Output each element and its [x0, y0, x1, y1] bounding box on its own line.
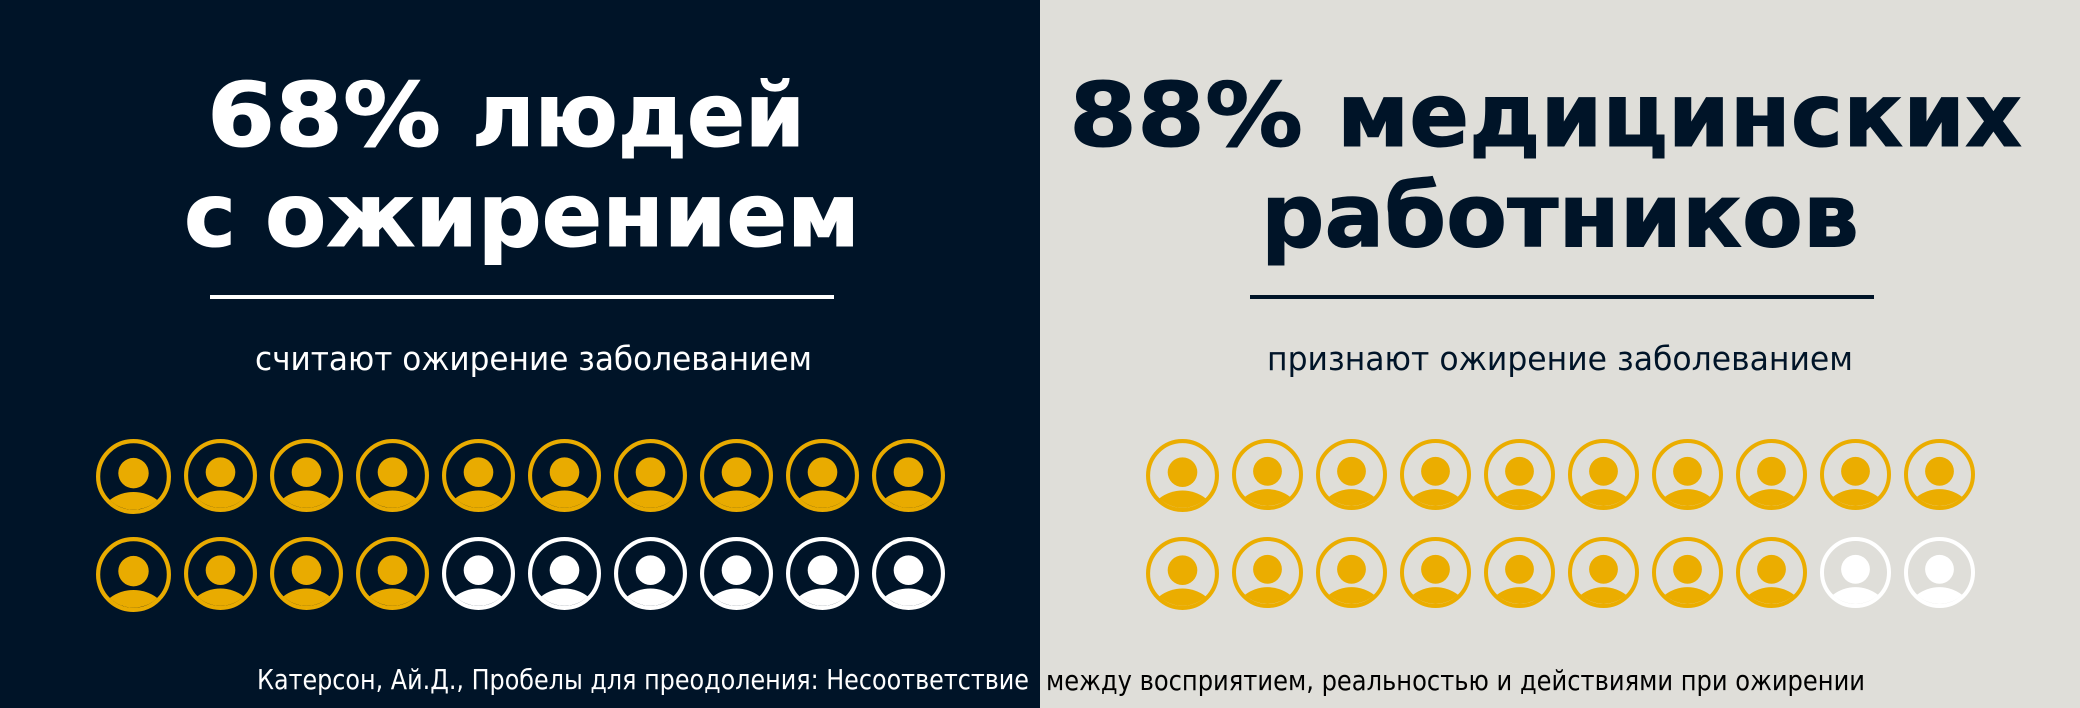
left heading: ожирением: [265, 164, 860, 267]
left heading: с: [184, 164, 236, 267]
left heading: [184, 64, 860, 267]
right heading: медицинских: [1337, 64, 2022, 167]
right heading: 88%: [1069, 64, 1303, 167]
panel: right background: [1040, 0, 2080, 708]
source citation: Катерсон, Ай.Д., Пробелы для преодоления: Несоответствие: [257, 663, 1029, 696]
panel: left background: [0, 0, 1040, 708]
left subtitle: считают ожирение заболеванием: [255, 339, 812, 378]
right divider: [1250, 295, 1874, 299]
left heading: 68%: [207, 64, 441, 167]
left heading: людей: [472, 64, 805, 167]
left icon grid: 68%: [98, 441, 943, 610]
right heading: работников: [1261, 164, 1859, 268]
right heading: [1069, 64, 2022, 268]
source citation: [257, 663, 1865, 697]
right icon grid: 88%: [1148, 441, 1973, 608]
right subtitle: признают ожирение заболеванием: [1267, 339, 1853, 378]
left divider: [210, 295, 834, 299]
source citation: между восприятием, реальностью и действиями при ожирении: [1046, 664, 1865, 697]
